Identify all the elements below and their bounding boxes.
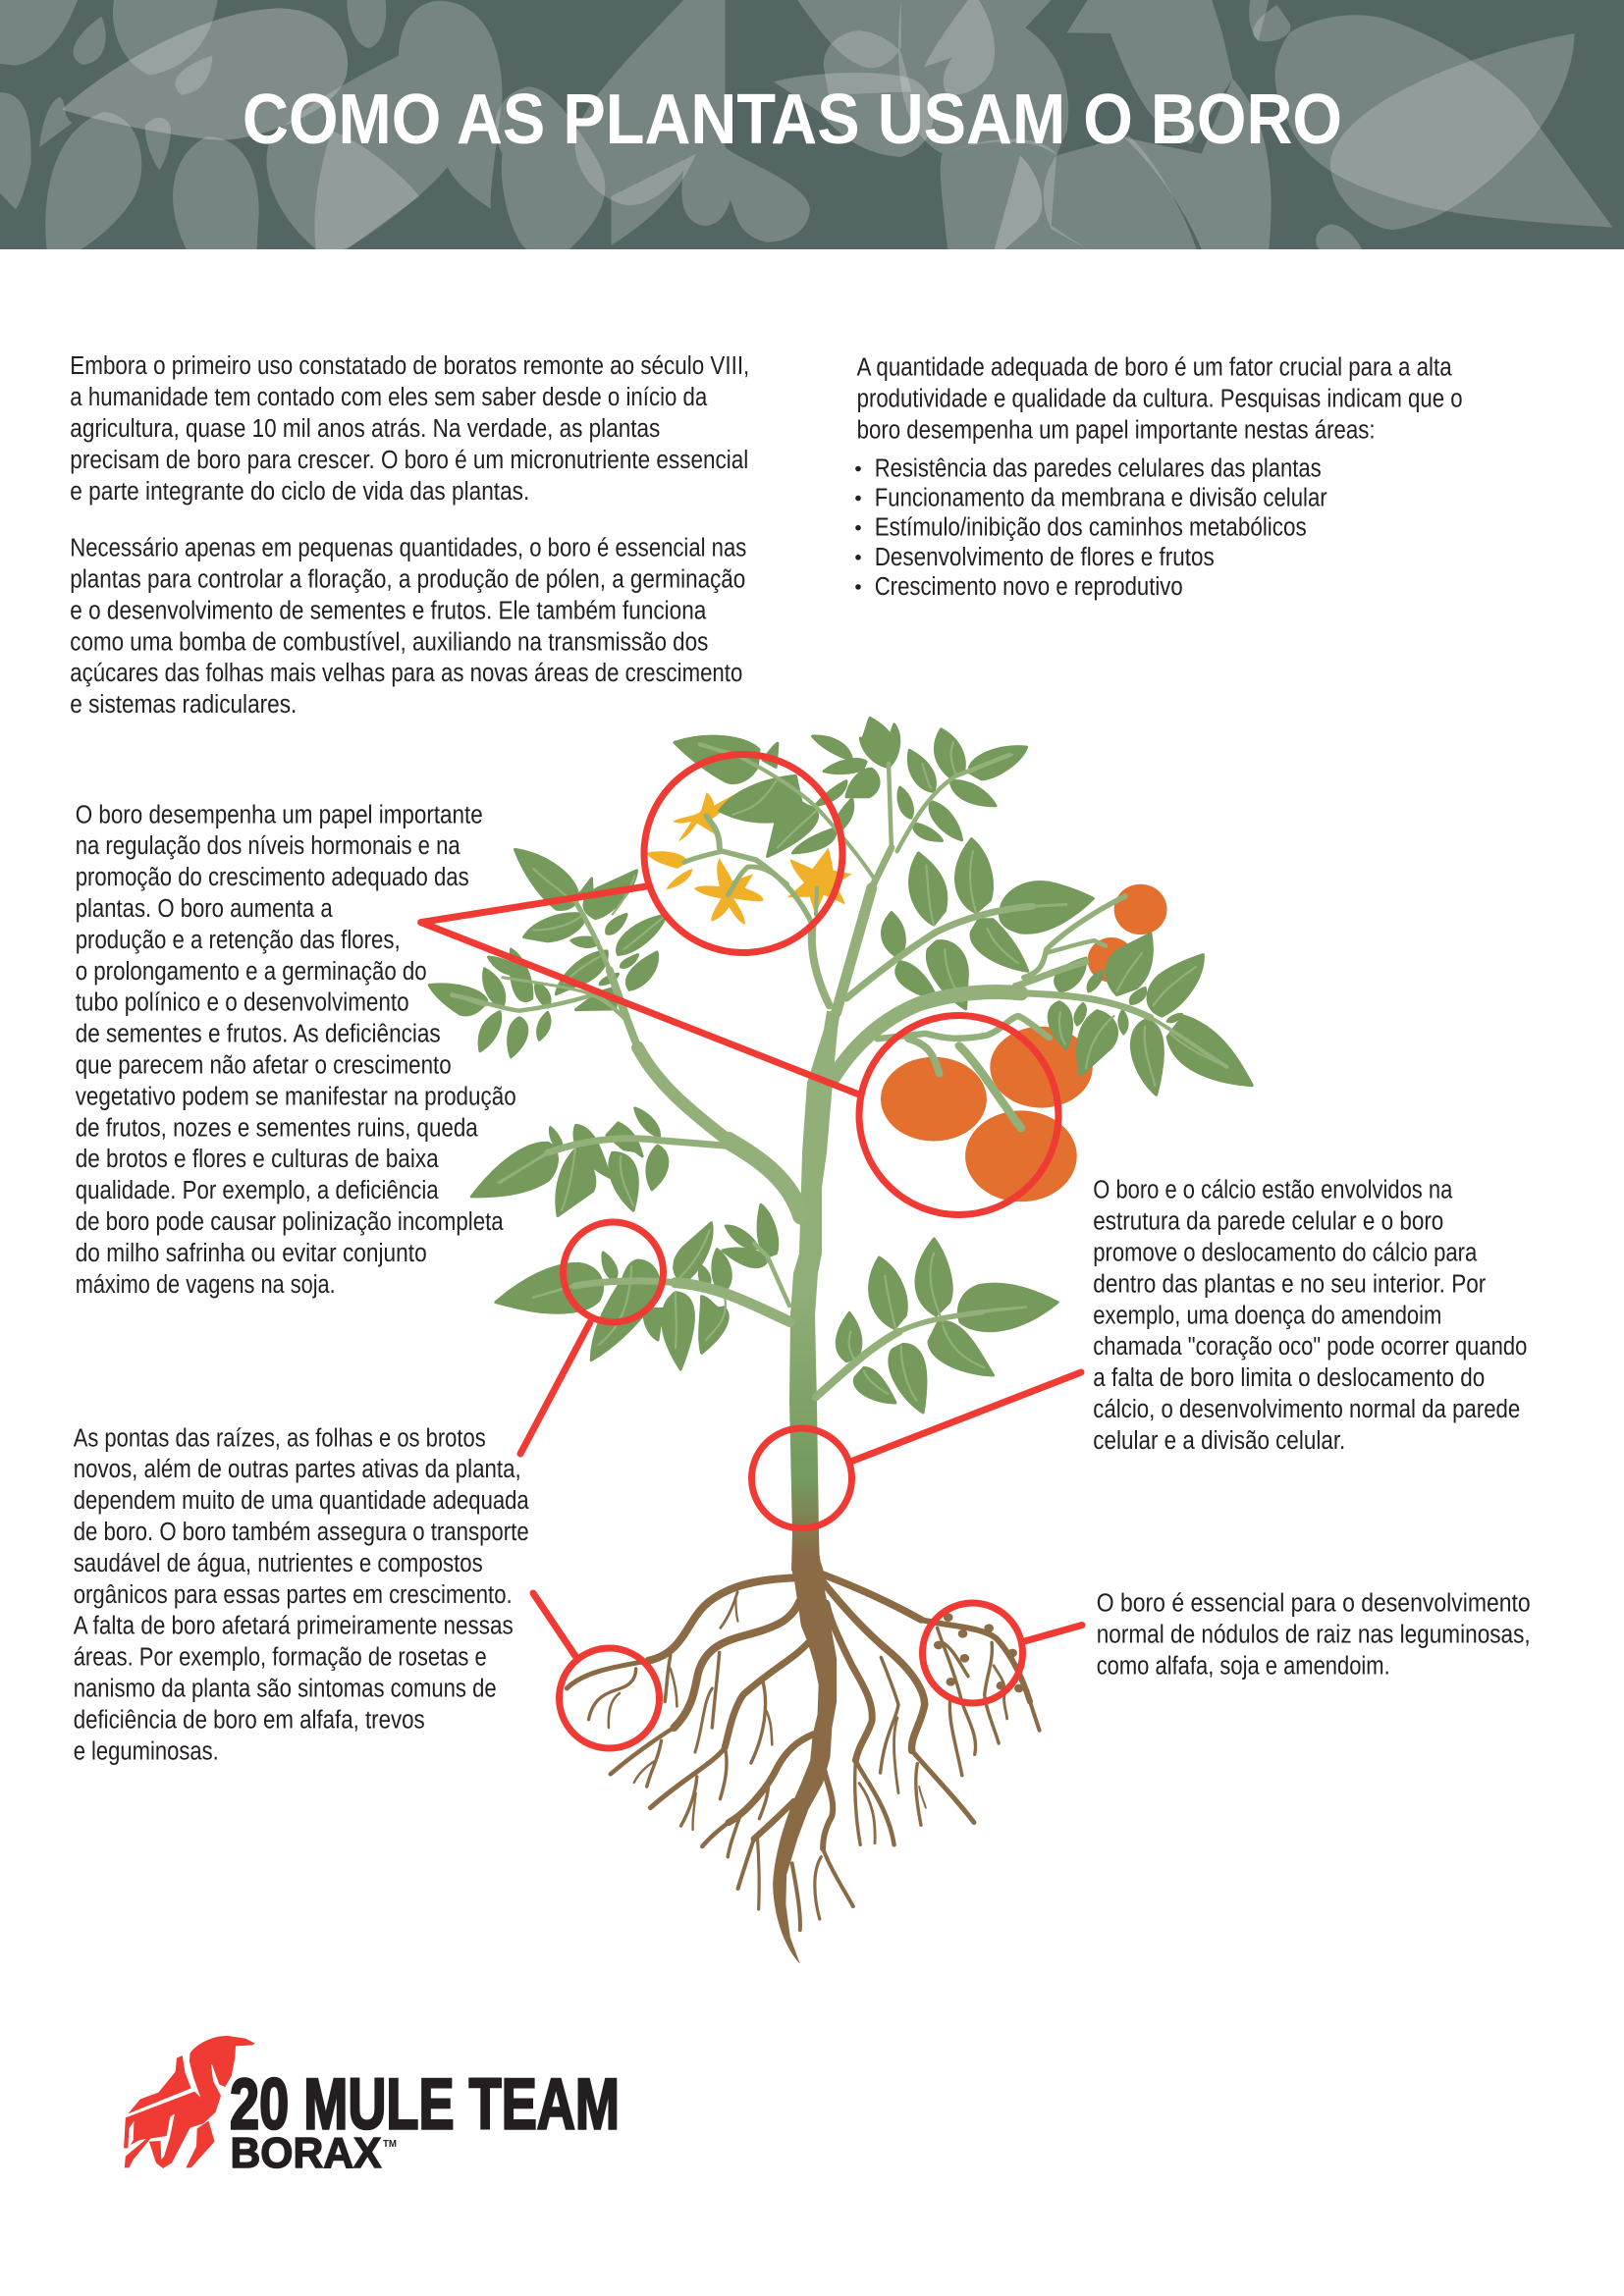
text: root tips and new growth: dependem muito de uma quantidade adequada <box>74 1487 529 1515</box>
logo: 20 Mule Team Borax <box>124 2036 620 2177</box>
text: calcium and cell wall: dentro das plantas e no seu interior. Por <box>1093 1270 1487 1298</box>
text: root tips and new growth: novos, além de outras partes ativas da planta, <box>74 1456 521 1483</box>
text: calcium and cell wall: promove o deslocamento do cálcio para <box>1093 1239 1478 1266</box>
text: calcium and cell wall: celular e a divisão celular. <box>1093 1427 1345 1455</box>
intro text: left column: e sistemas radiculares. <box>70 691 297 719</box>
text: hormones and flowers: na regulação dos níveis hormonais e na <box>76 832 460 860</box>
text: root nodules: O boro é essencial para o desenvolvimento <box>1097 1590 1531 1618</box>
intro text: right column with bullet list: Crescimento novo e reprodutivo <box>875 573 1183 601</box>
intro text: right column with bullet list <box>855 354 1463 601</box>
red callout: nodule circle <box>923 1603 1082 1703</box>
red callout: lateral root circle <box>533 1593 660 1748</box>
intro text: left column: Embora o primeiro uso constatado de boratos remonte ao século VIII, <box>70 352 749 380</box>
leaf veins <box>452 742 1226 1210</box>
red callout: leaf circle <box>520 1222 664 1454</box>
text: hormones and flowers: vegetativo podem se manifestar na produção <box>76 1083 516 1110</box>
intro text: left column: açúcares das folhas mais velhas para as novas áreas de crescimento <box>70 660 742 687</box>
yellow flowers <box>646 791 852 925</box>
text: hormones and flowers: qualidade. Por exemplo, a deficiência <box>76 1177 439 1204</box>
text: hormones and flowers <box>76 801 516 1299</box>
roots <box>567 1556 1040 1964</box>
root nodules <box>934 1613 1024 1692</box>
red callout: flower and fruit circles with connector <box>421 754 1058 1215</box>
text: calcium and cell wall: estrutura da parede celular e o boro <box>1093 1208 1443 1236</box>
intro text: left column: e parte integrante do ciclo de vida das plantas. <box>70 478 529 506</box>
text: root tips and new growth: áreas. Por exemplo, formação de rosetas e <box>74 1644 487 1672</box>
intro text: left column: plantas para controlar a floração, a produção de pólen, a germinação <box>70 565 745 593</box>
text: hormones and flowers: do milho safrinha ou evitar conjunto <box>76 1240 427 1267</box>
intro text: left column: precisam de boro para crescer. O boro é um micronutriente essencial <box>70 447 748 474</box>
text: root tips and new growth <box>74 1424 529 1765</box>
logo: 20 Mule Team Borax: BORAX <box>230 2130 381 2177</box>
plant illustration <box>429 718 1252 1964</box>
text: calcium and cell wall: chamada "coração oco" pode ocorrer quando <box>1093 1333 1527 1361</box>
intro text: right column with bullet list: Desenvolvimento de flores e frutos <box>875 544 1215 571</box>
intro text: left column: e o desenvolvimento de sementes e frutos. Ele também funciona <box>70 597 707 624</box>
intro text: right column with bullet list: produtividade e qualidade da cultura. Pesquisas indicam que o <box>857 385 1463 412</box>
intro text: left column: como uma bomba de combustível, auxiliando na transmissão dos <box>70 628 708 656</box>
leaf veins lower <box>533 1230 1026 1401</box>
upper branches <box>452 744 1226 1216</box>
intro text: right column with bullet list: Funcionamento da membrana e divisão celular <box>875 485 1327 512</box>
banner leaf pattern <box>0 0 1612 249</box>
intro text: right column with bullet list: A quantidade adequada de boro é um fator crucial para a alta <box>857 354 1452 382</box>
wordmark: 20 MULE TEAM <box>230 2062 620 2144</box>
side roots <box>567 1575 1040 1930</box>
taproot <box>773 1556 837 1964</box>
intro text: left column: agricultura, quase 10 mil anos atrás. Na verdade, as plantas <box>70 415 660 443</box>
lower leaves <box>496 1204 1057 1413</box>
intro text: right column with bullet list: boro desempenha um papel importante nestas áreas: <box>857 416 1376 444</box>
lower branches <box>533 1244 1026 1397</box>
text: root nodules: como alfafa, soja e amendoim. <box>1097 1652 1390 1680</box>
text: root tips and new growth: orgânicos para essas partes em crescimento. <box>74 1581 513 1609</box>
intro text: left column <box>70 352 749 719</box>
text: hormones and flowers: o prolongamento e a germinação do <box>76 958 427 986</box>
text: hormones and flowers: plantas. O boro aumenta a <box>76 895 333 923</box>
text: root tips and new growth: saudável de água, nutrientes e compostos <box>74 1550 483 1577</box>
header banner <box>0 0 1624 249</box>
text: calcium and cell wall: O boro e o cálcio estão envolvidos na <box>1093 1177 1453 1204</box>
text: hormones and flowers: que parecem não afetar o crescimento <box>76 1052 452 1080</box>
text: hormones and flowers: de brotos e flores e culturas de baixa <box>76 1146 439 1173</box>
logo: 20 Mule Team Borax: TM <box>383 2139 397 2150</box>
intro text: left column: a humanidade tem contado com eles sem saber desde o início da <box>70 384 708 411</box>
text: root tips and new growth: de boro. O boro também assegura o transporte <box>74 1519 529 1546</box>
text: root tips and new growth: nanismo da planta são sintomas comuns de <box>74 1675 497 1702</box>
red callout: stem circle <box>752 1372 1081 1528</box>
text: root nodules: normal de nódulos de raiz nas leguminosas, <box>1097 1622 1531 1649</box>
text: hormones and flowers: de frutos, nozes e sementes ruins, queda <box>76 1114 478 1142</box>
text: hormones and flowers: tubo polínico e o desenvolvimento <box>76 989 409 1017</box>
text: root tips and new growth: A falta de boro afetará primeiramente nessas <box>74 1613 514 1640</box>
icon: red mule <box>124 2036 255 2168</box>
text: calcium and cell wall: a falta de boro limita o deslocamento do <box>1093 1364 1485 1392</box>
title: COMO AS PLANTAS USAM O BORO <box>243 80 1342 159</box>
text: root tips and new growth: e leguminosas. <box>74 1737 219 1765</box>
text: hormones and flowers: promoção do crescimento adequado das <box>76 864 469 891</box>
intro text: right column with bullet list: Estímulo/inibição dos caminhos metabólicos <box>875 514 1307 542</box>
text: root tips and new growth: deficiência de boro em alfafa, trevos <box>74 1706 425 1734</box>
text: hormones and flowers: de boro pode causar polinização incompleta <box>76 1208 504 1236</box>
main stem <box>789 1011 840 1571</box>
text: hormones and flowers: produção e a retenção das flores, <box>76 927 401 954</box>
upper leaves <box>429 718 1252 1216</box>
text: calcium and cell wall <box>1093 1177 1527 1455</box>
text: calcium and cell wall: exemplo, uma doença do amendoim <box>1093 1302 1441 1329</box>
text: hormones and flowers: máximo de vagens na soja. <box>76 1271 336 1299</box>
text: calcium and cell wall: cálcio, o desenvolvimento normal da parede <box>1093 1396 1520 1423</box>
intro text: left column: Necessário apenas em pequenas quantidades, o boro é essencial nas <box>70 535 746 562</box>
text: hormones and flowers: O boro desempenha um papel importante <box>76 801 483 828</box>
tomato fruits <box>881 884 1167 1201</box>
intro text: right column with bullet list: Resistência das paredes celulares das plantas <box>875 454 1322 482</box>
text: hormones and flowers: de sementes e frutos. As deficiências <box>76 1021 441 1048</box>
text: root nodules <box>1097 1590 1531 1680</box>
text: root tips and new growth: As pontas das raízes, as folhas e os brotos <box>74 1424 486 1452</box>
